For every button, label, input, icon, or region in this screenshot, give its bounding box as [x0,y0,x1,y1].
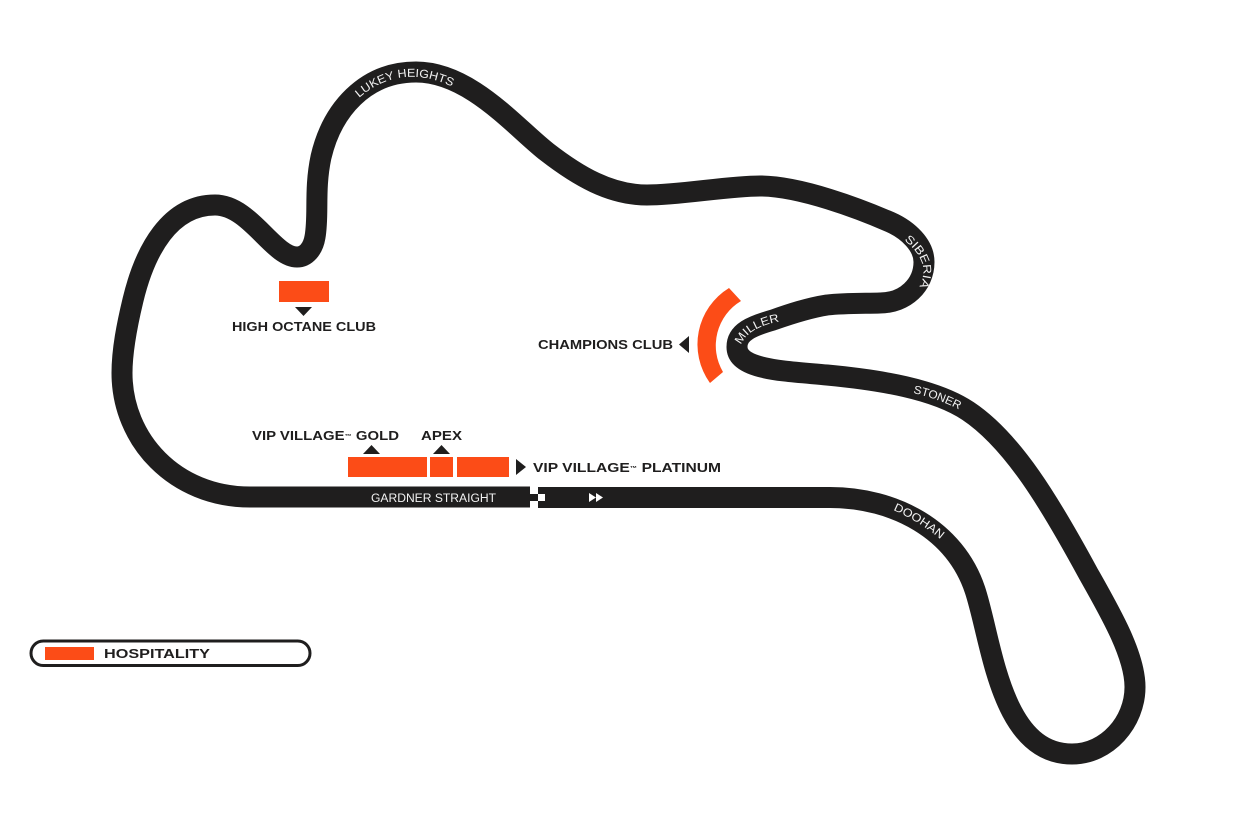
hospitality zone: Champions Club [697,288,741,383]
legend [31,641,310,666]
marker: Champions Club [679,336,689,353]
marker: Apex [433,445,450,454]
label: High Octane Club: HIGH OCTANE CLUB [232,320,376,334]
track label: Doohan: DOOHAN [894,503,945,539]
hospitality zone: VIP Village Gold [348,457,427,477]
marker: High Octane Club [295,307,312,316]
label: VIP Village Platinum: ™ [630,465,637,472]
hospitality zone: High Octane Club [279,281,329,302]
label: VIP Village Gold: ™ [345,433,352,440]
hospitality zone: VIP Village Platinum [457,457,509,477]
direction arrows [589,493,603,502]
hospitality zone: Apex [430,457,453,477]
track label: Siberia: SIBERIA [906,236,932,287]
start finish line [530,486,546,509]
label: VIP Village Gold: GOLD [352,429,399,443]
label: VIP Village Platinum: VIP VILLAGE [533,461,611,475]
legend label: HOSPITALITY [104,647,211,661]
track label: Stoner: STONER [914,386,961,410]
race track [122,72,1135,754]
track label: Lukey Heights: LUKEY HEIGHTS [354,68,454,98]
marker: VIP Village Gold [363,445,380,454]
label: Champions Club: CHAMPIONS CLUB [538,338,673,352]
label: VIP Village Platinum: PLATINUM [637,461,721,475]
label: VIP Village Gold: VIP VILLAGE [252,429,330,443]
marker: VIP Village Platinum [516,459,526,475]
legend swatch [45,647,94,660]
track label: Miller: MILLER [734,314,779,344]
track label: Gardner Straight: GARDNER STRAIGHT [371,493,496,505]
label: Apex: APEX [421,429,463,443]
